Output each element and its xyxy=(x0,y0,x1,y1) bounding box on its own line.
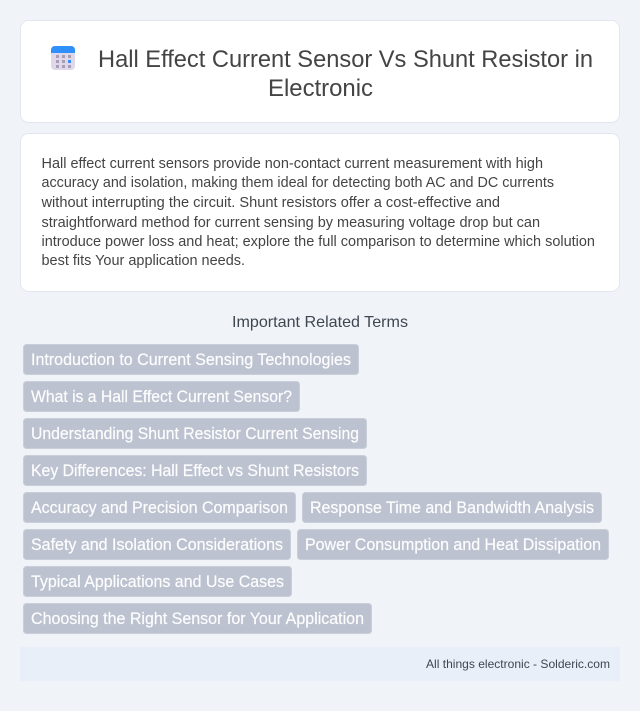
tag: hall effect sensor: What is a Hall Effect Current Sensor? xyxy=(31,388,292,406)
tag: introduction: Introduction to Current Sensing Technologies xyxy=(31,351,351,369)
tag: key differences xyxy=(24,456,366,486)
title: Hall Effect Current Sensor Vs Shunt Resistor in xyxy=(98,46,593,73)
tag: safety xyxy=(24,530,290,560)
tag: response time xyxy=(302,492,602,522)
tag: key differences: Key Differences: Hall Effect vs Shunt Resistors xyxy=(31,462,359,480)
tag list xyxy=(24,344,608,634)
panel: introduction text: Hall effect current sensors provide non-contact current measurement with high xyxy=(42,156,543,172)
tag: choosing: Choosing the Right Sensor for Your Application xyxy=(31,610,364,628)
tag: response time: Response Time and Bandwidth Analysis xyxy=(310,499,594,517)
title xyxy=(98,46,593,102)
panel: introduction text xyxy=(20,134,620,292)
panel: introduction text: accuracy and isolation, making them ideal for detecting both AC and DC currents xyxy=(42,175,554,191)
tag: power: Power Consumption and Heat Dissipation xyxy=(305,536,601,554)
tag: shunt resistor: Understanding Shunt Resistor Current Sensing xyxy=(31,425,359,443)
tag: choosing xyxy=(24,604,372,634)
panel: introduction text: straightforward method for current sensing by measuring voltage drop but can xyxy=(42,215,540,231)
panel: introduction text: best fits Your application needs. xyxy=(42,253,245,269)
tag: accuracy xyxy=(24,492,296,522)
panel: introduction text: without interrupting the circuit. Shunt resistors offer a cost-effective and xyxy=(40,195,500,211)
tag: applications: Typical Applications and Use Cases xyxy=(31,573,284,591)
tag: applications xyxy=(24,566,292,596)
tag: hall effect sensor xyxy=(24,382,300,412)
tag: introduction xyxy=(24,344,358,374)
tag: safety: Safety and Isolation Considerations xyxy=(31,536,283,554)
footer: All things electronic - Solderic.com xyxy=(426,657,610,671)
heading: important related terms: Important Related Terms xyxy=(232,314,408,331)
tag: accuracy: Accuracy and Precision Comparison xyxy=(31,499,288,517)
footer xyxy=(20,647,620,681)
panel: title card xyxy=(20,20,620,122)
icon: calendar xyxy=(51,46,75,70)
tag: power xyxy=(298,530,608,560)
tag: shunt resistor xyxy=(24,418,366,448)
title: Electronic xyxy=(268,75,373,102)
panel: introduction text: introduce power loss and heat; explore the full comparison to determine which solution xyxy=(42,234,595,250)
